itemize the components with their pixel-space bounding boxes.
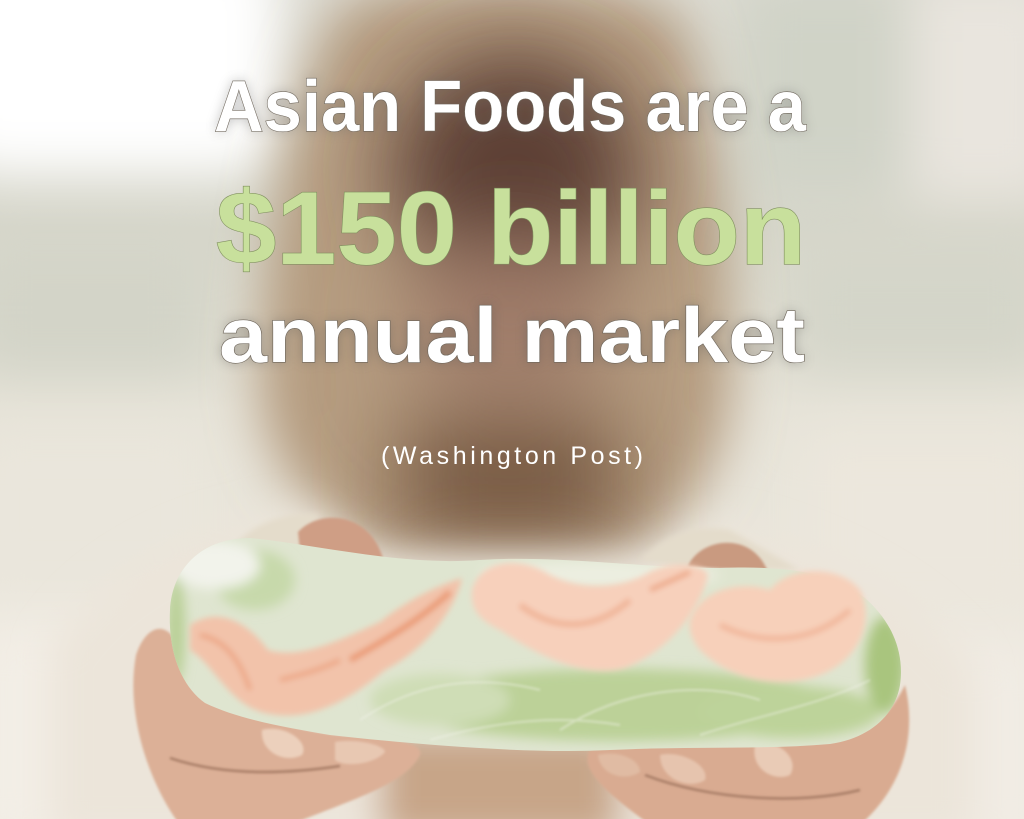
headline line 3: annual market [219, 291, 805, 379]
shrimp middle [472, 563, 708, 671]
sleeves [200, 514, 800, 570]
right hand [587, 543, 909, 819]
headline line 3: annual market [219, 291, 805, 379]
headline line 2: $150 billion: $150 billion [216, 171, 806, 287]
spring roll [160, 530, 910, 755]
blurred hair [260, 0, 731, 555]
shrimp left [190, 578, 462, 716]
headline line 1: Asian Foods are a [214, 67, 807, 147]
left hand [133, 518, 420, 819]
headline line 1: Asian Foods are a [214, 67, 807, 147]
blurred face [390, 50, 640, 540]
shrimp right [689, 571, 866, 682]
headline [214, 67, 807, 379]
blurred body [50, 512, 975, 819]
hands and spring roll photo [133, 518, 910, 819]
source credit: (Washington Post) [381, 442, 643, 470]
